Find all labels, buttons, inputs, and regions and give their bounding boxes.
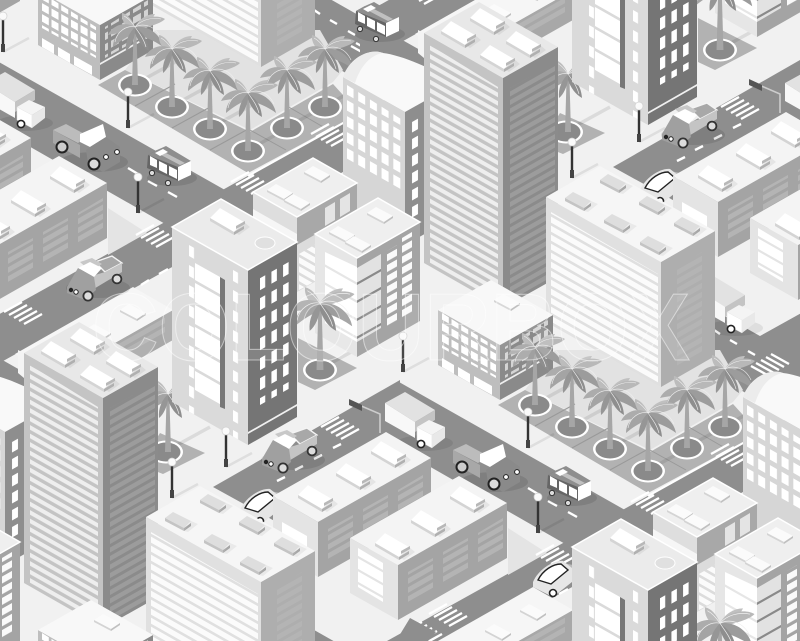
building: round roof — [0, 372, 55, 565]
truck — [785, 72, 800, 131]
building: low office — [438, 280, 553, 400]
palm tree — [289, 287, 354, 370]
building: block — [0, 518, 20, 641]
building: behind tower — [415, 0, 573, 87]
truck — [695, 277, 763, 336]
building: tall tower — [18, 322, 158, 628]
building: stepped block — [653, 478, 757, 612]
bus — [355, 2, 405, 42]
building: right block — [715, 0, 800, 37]
building: long block — [750, 156, 800, 300]
palm tree — [541, 60, 598, 132]
palm row — [108, 13, 355, 151]
bus — [547, 466, 597, 506]
palm tree — [141, 380, 198, 452]
building: left edge block — [0, 0, 20, 37]
building: low office — [38, 0, 153, 80]
building: stepped block — [253, 158, 357, 292]
building: long block — [350, 476, 507, 620]
building: long block — [273, 432, 431, 577]
building: round roof — [743, 372, 800, 565]
building: tall tower — [418, 2, 558, 308]
building: vented block — [546, 166, 715, 387]
pickup — [66, 256, 130, 301]
jeep — [53, 124, 128, 172]
bus — [147, 146, 197, 186]
palm tree — [689, 607, 754, 641]
palm row — [508, 333, 755, 471]
pickup — [661, 103, 725, 148]
building: behind tower — [15, 287, 173, 407]
street lamps — [0, 12, 665, 533]
building: round roof — [343, 52, 455, 245]
building: brick tower — [572, 519, 697, 641]
car — [240, 489, 280, 525]
building: long block — [673, 112, 800, 257]
building: block — [315, 198, 420, 357]
building: brick tower — [572, 0, 697, 125]
building: long block — [0, 156, 107, 300]
building: behind tower — [415, 587, 573, 641]
traffic signal — [349, 399, 380, 433]
building: brick tower — [172, 199, 297, 445]
building: block — [715, 518, 800, 641]
building: vented block — [146, 0, 315, 67]
car — [640, 169, 680, 205]
truck — [0, 72, 53, 131]
car — [533, 561, 573, 597]
pickup — [261, 428, 325, 473]
jeep — [453, 444, 528, 492]
building: vented block — [146, 486, 315, 641]
traffic signal — [749, 79, 780, 113]
watermark: COLOURBOX — [92, 274, 690, 381]
truck — [385, 392, 453, 451]
building: long block — [0, 112, 31, 257]
palm tree — [689, 0, 754, 50]
building: low office — [38, 600, 153, 641]
